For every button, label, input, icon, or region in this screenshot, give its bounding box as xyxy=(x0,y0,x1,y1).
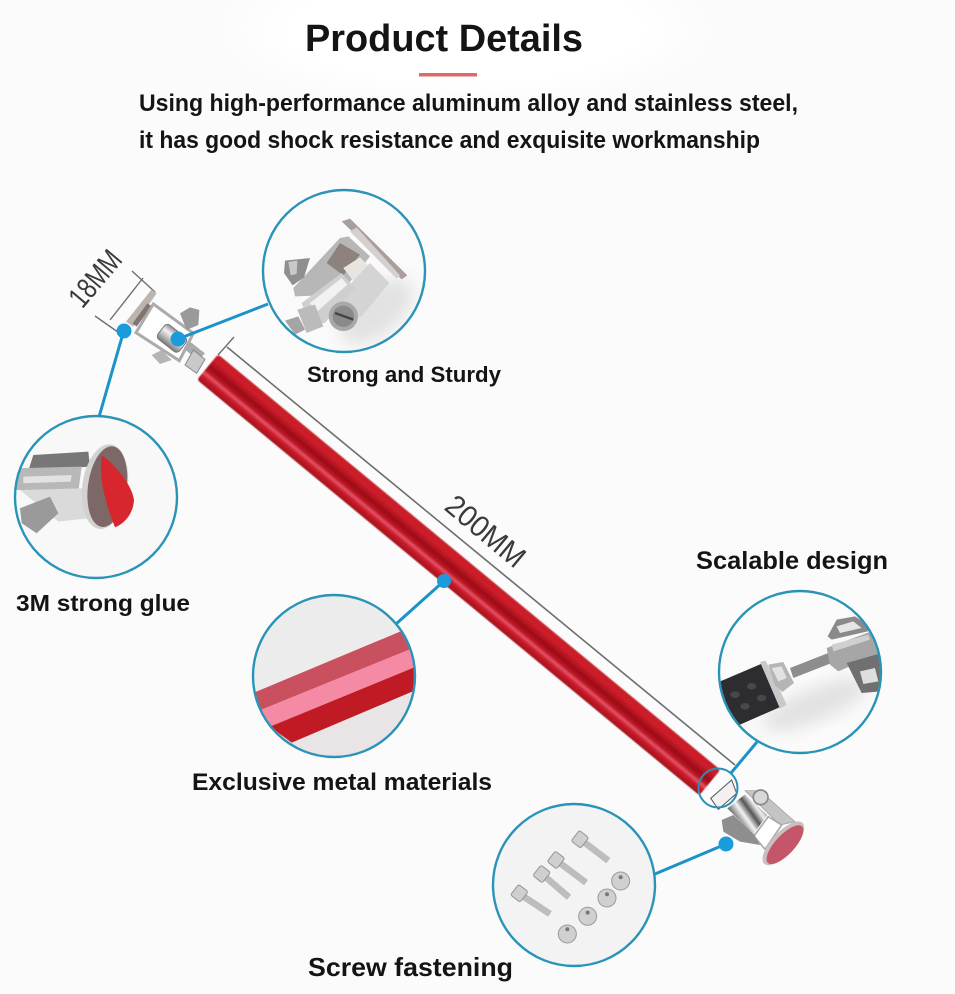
title accent bar xyxy=(419,73,477,76)
detail circle: 3M strong glue xyxy=(13,416,177,578)
callout ring on tube end xyxy=(698,768,738,808)
dimension: 200MM: 200MM xyxy=(438,489,532,575)
dimension: 200MM xyxy=(218,337,735,765)
dimension: 18MM xyxy=(63,244,155,337)
detail circle: exclusive metal xyxy=(250,595,420,763)
detail circle: screw fastening xyxy=(493,804,655,966)
anchor dots xyxy=(116,324,734,852)
nuts xyxy=(558,872,630,943)
red strut tube xyxy=(197,354,720,795)
detail circle: strong and sturdy xyxy=(263,190,425,357)
label: scalable design: Scalable design xyxy=(696,547,888,575)
detail circle: scalable design xyxy=(717,591,882,753)
title: Product Details xyxy=(305,18,583,60)
intro text: it has good shock resistance and exquisite workmanship xyxy=(139,127,760,154)
leader lines xyxy=(99,304,757,874)
intro text xyxy=(139,90,798,154)
label: 3M strong glue: 3M strong glue xyxy=(16,590,190,616)
dimension: 18MM: 18MM xyxy=(63,244,129,314)
intro text: Using high-performance aluminum alloy and stainless steel, xyxy=(139,90,798,117)
upper end fitting xyxy=(126,289,205,373)
label: strong and sturdy: Strong and Sturdy xyxy=(307,362,502,387)
lower end fitting xyxy=(711,780,811,872)
screws xyxy=(523,842,608,914)
label: exclusive metal materials: Exclusive metal materials xyxy=(192,769,492,796)
label: screw fastening: Screw fastening xyxy=(308,952,513,982)
